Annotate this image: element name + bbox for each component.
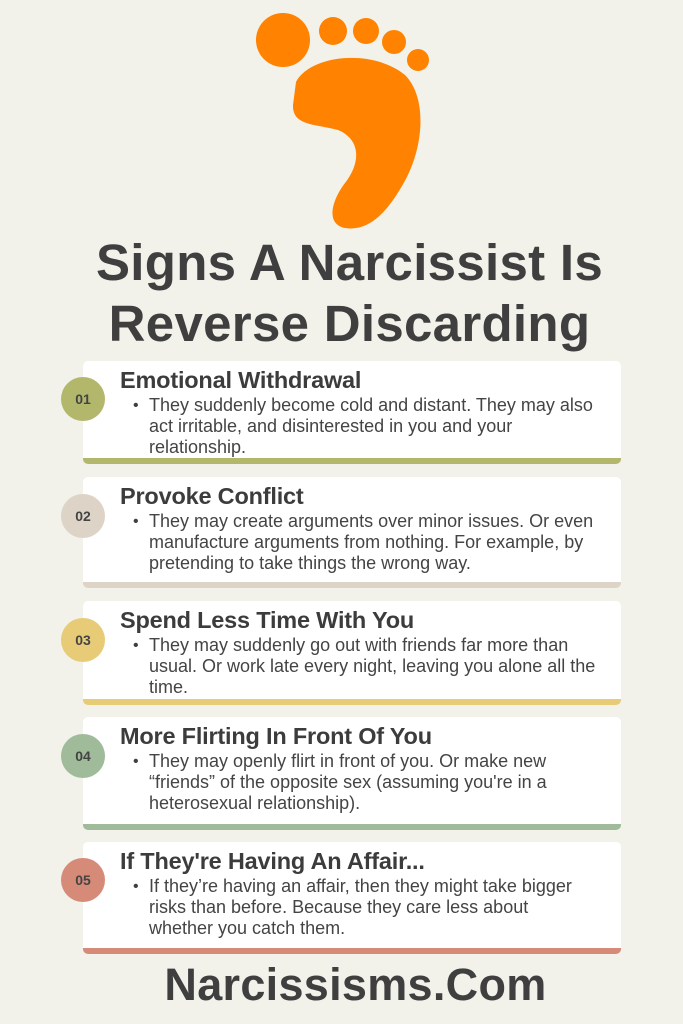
badge 01: [61, 377, 105, 421]
panel: 05: [83, 842, 621, 954]
panel: 02: •: [133, 513, 139, 530]
badge 03: [61, 618, 105, 662]
panel: 01: [83, 361, 621, 464]
text 03: They may suddenly go out with friends far more than usual. Or work late every night, leaving you alone all the time.: [149, 635, 595, 697]
text 05: If they’re having an affair, then they might take bigger risks than before. Because they care less about whether you catch them.: [149, 876, 572, 938]
title: Reverse Discarding: [109, 295, 590, 352]
badge 04: [61, 734, 105, 778]
heading 04: More Flirting In Front Of You: [120, 723, 432, 749]
badge 01: 01: [75, 391, 91, 407]
panel: 01: •: [133, 397, 139, 414]
text 02: They may create arguments over minor issues. Or even manufacture arguments from nothing. For example, by pretending to take things the wrong way.: [149, 511, 593, 573]
text 04: They may openly flirt in front of you. Or make new “friends” of the opposite sex (assuming you're in a heterosexual relationship).: [149, 751, 547, 813]
panel: 04: •: [133, 753, 139, 770]
footer: Narcissisms.Com: [164, 959, 547, 1010]
icon: orange footprint: [256, 13, 429, 228]
badge 02: 02: [75, 508, 91, 524]
heading 03: Spend Less Time With You: [120, 607, 414, 633]
panel: 02: [83, 477, 621, 588]
title: [96, 234, 603, 352]
heading 01: Emotional Withdrawal: [120, 367, 361, 393]
panel: 03: [83, 601, 621, 705]
text 01: They suddenly become cold and distant. They may also act irritable, and disinterested in you and your relationship.: [149, 395, 593, 457]
panel: 05: •: [133, 878, 139, 895]
title: Signs A Narcissist Is: [96, 234, 603, 291]
badge 04: 04: [75, 748, 91, 764]
heading 05: If They're Having An Affair...: [120, 848, 425, 874]
badge 05: 05: [75, 872, 91, 888]
panel: 03: •: [133, 637, 139, 654]
badge 02: [61, 494, 105, 538]
heading 02: Provoke Conflict: [120, 483, 304, 509]
badge 05: [61, 858, 105, 902]
badge 03: 03: [75, 632, 91, 648]
panel: 04: [83, 717, 621, 830]
